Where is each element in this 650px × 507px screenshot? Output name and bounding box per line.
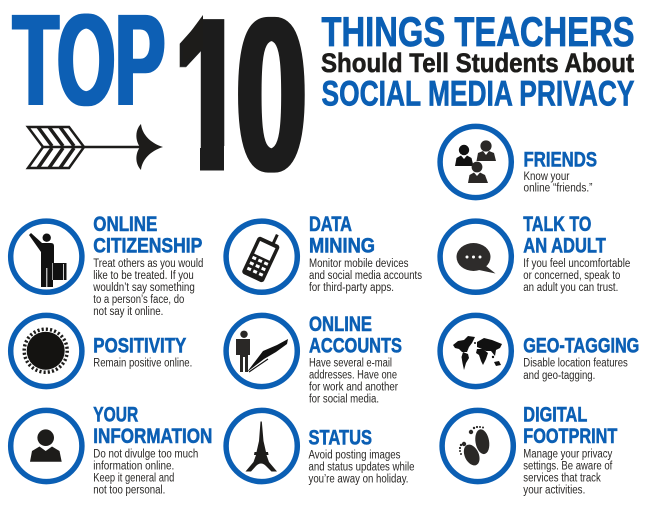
heading: DATA (309, 212, 352, 236)
text block (523, 448, 613, 496)
text block: information online. (93, 460, 174, 472)
text block: Keep it general and (93, 472, 174, 484)
text block: and status updates while (308, 461, 414, 473)
icon: user bust (11, 410, 82, 482)
heading (93, 403, 212, 448)
text block: services that track (523, 472, 601, 484)
icon: speech bubble (440, 221, 511, 292)
heading: INFORMATION (93, 424, 212, 448)
text block (309, 358, 398, 406)
panel: online accounts (226, 312, 402, 406)
text block: like to be treated. If you (93, 270, 194, 282)
heading: TALK TO (523, 212, 591, 236)
heading: ACCOUNTS (309, 334, 402, 358)
text block: for work and another (309, 382, 398, 394)
icon: mobile phone (226, 221, 297, 292)
text block: Do not divulge too much (93, 448, 198, 460)
icon: eiffel tower (226, 410, 297, 482)
icon: sun (11, 315, 82, 387)
panel: data mining (226, 212, 422, 294)
text block: If you feel uncomfortable (523, 258, 630, 270)
heading: YOUR (93, 403, 139, 427)
panel: status (226, 410, 414, 485)
panel: positivity (11, 315, 192, 387)
text block: Disable location features (523, 358, 628, 370)
text block (524, 171, 593, 195)
text block: and geo-tagging. (523, 370, 595, 382)
text block (523, 358, 628, 382)
panel: digital footprint (442, 403, 617, 496)
icon: world map (440, 315, 511, 387)
heading: STATUS (308, 425, 372, 449)
text block: for social media. (309, 394, 379, 406)
heading: FOOTPRINT (523, 424, 617, 448)
text block (308, 449, 414, 485)
heading: MINING (309, 234, 375, 258)
panel: talk to an adult (440, 212, 630, 294)
heading: ONLINE (309, 312, 372, 336)
text block: you’re away on holiday. (308, 473, 408, 485)
text block: Remain positive online. (93, 358, 192, 370)
text block: online “friends.” (524, 183, 593, 195)
heading (309, 312, 402, 358)
panel: friends (440, 126, 597, 198)
arrow (28, 124, 163, 170)
panel: your information (11, 403, 212, 496)
text block: Monitor mobile devices (309, 258, 409, 270)
text block: addresses. Have one (309, 370, 397, 382)
heading (523, 212, 606, 258)
heading (309, 212, 375, 258)
heading (523, 403, 617, 448)
panel: online citizenship (11, 212, 203, 318)
text block: Know your (524, 171, 570, 183)
text block: Manage your privacy (523, 448, 613, 460)
heading: CITIZENSHIP (93, 234, 202, 258)
text block: to a person’s face, do (93, 294, 184, 306)
text block: Treat others as you would (93, 258, 203, 270)
heading: DIGITAL (523, 403, 587, 427)
text block: not say it online. (93, 306, 163, 318)
text block: or concerned, speak to (523, 270, 620, 282)
text block: for third-party apps. (309, 282, 394, 294)
text block (523, 258, 630, 294)
text block: wouldn’t say something (92, 282, 195, 294)
text block (92, 258, 203, 318)
heading: POSITIVITY (93, 334, 186, 358)
text block: and social media accounts (309, 270, 422, 282)
icon: footprints (442, 410, 513, 482)
icon: friends (440, 126, 511, 198)
text block: not too personal. (93, 484, 165, 496)
text block: Avoid posting images (308, 449, 401, 461)
text block (93, 448, 198, 496)
text block: settings. Be aware of (523, 460, 613, 472)
icon: person with shadow (226, 315, 297, 387)
heading: FRIENDS (524, 148, 597, 172)
panel: geo-tagging (440, 315, 639, 387)
text block: Have several e-mail (309, 358, 392, 370)
heading: ONLINE (93, 212, 157, 236)
text block: your activities. (523, 484, 585, 496)
text block (309, 258, 422, 294)
text block: an adult you can trust. (523, 282, 618, 294)
title: 10 (174, 0, 307, 218)
heading: AN ADULT (523, 234, 606, 258)
icon: person with briefcase (11, 221, 82, 292)
heading (93, 212, 202, 258)
